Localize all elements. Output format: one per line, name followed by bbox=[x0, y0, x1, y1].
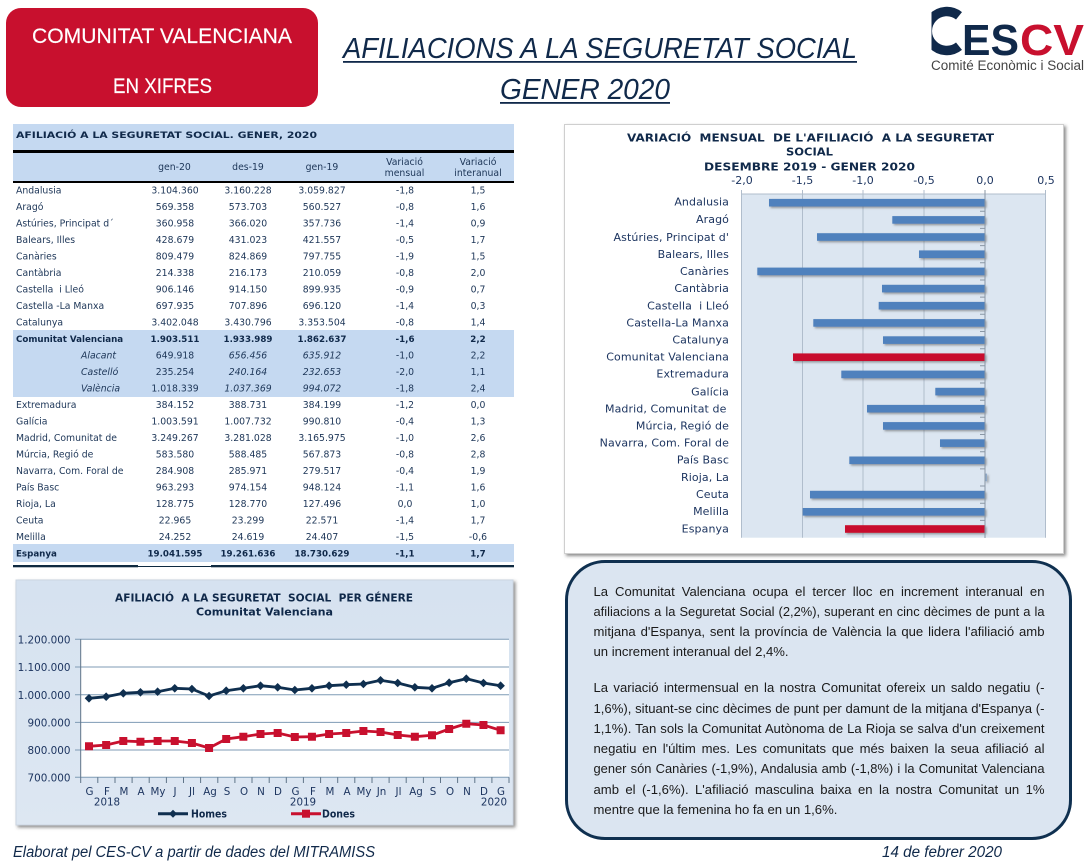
line chart title: Comunitat Valenciana bbox=[196, 606, 333, 618]
x axis labels: Ag bbox=[203, 786, 217, 798]
row: València: 1.037.369 bbox=[224, 384, 272, 394]
y axis labels: 1.000.000 bbox=[18, 690, 70, 702]
row: Catalunya: Catalunya bbox=[16, 318, 63, 328]
category labels: Catalunya bbox=[672, 334, 729, 346]
y axis labels: 900.000 bbox=[28, 718, 70, 730]
badge: Comunitat Valenciana en xifres: EN XIFRES bbox=[113, 75, 212, 98]
row: Aragó: 1,6 bbox=[471, 202, 485, 213]
row: Canàries: Canàries bbox=[16, 252, 57, 262]
row: Astúries: Astúries, Principat d´ bbox=[16, 218, 114, 230]
row: Balears: 421.557 bbox=[303, 235, 341, 246]
row: Melilla: Melilla bbox=[16, 532, 46, 543]
row: Navarra: Navarra, Com. Foral de bbox=[16, 466, 124, 477]
row: País Basc: 1,6 bbox=[471, 482, 485, 494]
row: Madrid: 3.165.975 bbox=[298, 433, 346, 444]
badge: Comunitat Valenciana en xifres bbox=[6, 8, 318, 107]
row: Comunitat Valenciana: 1.862.637 bbox=[298, 335, 346, 345]
row: Aragó: 573.703 bbox=[229, 202, 267, 213]
x axis labels: D bbox=[480, 786, 488, 798]
row: Castella i Lleó: 899.935 bbox=[303, 284, 341, 296]
row: Madrid: 2,6 bbox=[471, 433, 485, 444]
row: Andalusia: -1,8 bbox=[396, 186, 414, 196]
row: Andalusia: 3.160.228 bbox=[224, 186, 272, 196]
row: Castelló: -2,0 bbox=[396, 367, 414, 378]
row: Navarra: 279.517 bbox=[303, 466, 341, 477]
row: Catalunya: 3.430.796 bbox=[224, 318, 272, 328]
row: Rioja: 0,0 bbox=[398, 499, 412, 510]
row: Extremadura: -1,2 bbox=[396, 400, 414, 411]
row: Catalunya bbox=[16, 318, 485, 328]
x axis labels: -2,0 bbox=[731, 174, 753, 187]
category labels: Balears, Illes bbox=[658, 248, 729, 261]
row: Madrid: -1,0 bbox=[396, 433, 414, 444]
row: Galícia: -0,4 bbox=[396, 416, 414, 428]
bar chart title: SOCIAL bbox=[786, 146, 833, 158]
x axis labels: Jn bbox=[376, 786, 386, 798]
row: Melilla: -0,6 bbox=[469, 532, 487, 543]
row: Rioja bbox=[16, 499, 485, 510]
row: Alacant: 2,2 bbox=[471, 350, 485, 362]
row: Astúries: 0,9 bbox=[471, 218, 485, 230]
row: Alacant: Alacant bbox=[80, 350, 116, 362]
legend: Homes bbox=[191, 808, 227, 820]
x axis labels bbox=[731, 174, 1055, 187]
row: Comunitat Valenciana: 1.933.989 bbox=[224, 335, 272, 345]
x axis labels: -1,0 bbox=[852, 174, 874, 187]
x axis labels: D bbox=[274, 786, 282, 798]
row: Aragó bbox=[16, 202, 485, 213]
title: GENER 2020 bbox=[500, 74, 670, 106]
row: Múrcia: -0,8 bbox=[396, 450, 414, 460]
bars bbox=[757, 199, 987, 533]
y axis labels: 1.200.000 bbox=[18, 634, 70, 646]
text block: commentary: mitjana d'Espanya, sent la província de València la que lidera l'afiliació amb bbox=[594, 624, 1044, 639]
title: AFILIACIONS A LA SEGURETAT SOCIAL bbox=[341, 33, 857, 65]
row: Castella i Lleó: 906.146 bbox=[156, 284, 194, 296]
logo: CES-CV bbox=[920, 0, 1085, 73]
row: Ceuta: 1,7 bbox=[471, 516, 485, 526]
row: Catalunya: 1,4 bbox=[471, 318, 485, 328]
row: Castella-La Manxa: 696.120 bbox=[303, 301, 341, 312]
row: Balears: 428.679 bbox=[156, 235, 194, 246]
row: Comunitat Valenciana: -1,6 bbox=[396, 335, 414, 345]
row: Castelló: 232.653 bbox=[303, 367, 341, 378]
row: Castella-La Manxa: 707.896 bbox=[229, 301, 267, 312]
x axis labels: N bbox=[463, 786, 471, 798]
row: Múrcia: Múrcia, Regió de bbox=[16, 450, 94, 460]
row: València: 1.018.339 bbox=[151, 384, 199, 394]
x axis labels: F bbox=[104, 786, 110, 798]
row: Astúries: 360.958 bbox=[156, 218, 194, 230]
row: Extremadura bbox=[16, 400, 485, 411]
text block: commentary: gener són Canàries (-1,9%), Andalusia amb (-1,8%) i la Comunitat Valenciana bbox=[594, 761, 1044, 776]
row: Madrid: 3.249.267 bbox=[151, 433, 199, 444]
text block: commentary: La Comunitat Valenciana ocupa el tercer lloc en increment interanual en bbox=[594, 584, 1044, 599]
x axis labels: G bbox=[497, 786, 505, 798]
row: València bbox=[81, 384, 485, 394]
row: Castella i Lleó: 914.150 bbox=[229, 284, 267, 296]
row: Cantàbria: -0,8 bbox=[396, 268, 414, 279]
x axis labels: Jl bbox=[188, 786, 195, 798]
x axis labels: M bbox=[326, 786, 334, 798]
row: Comunitat Valenciana: Comunitat Valenciana bbox=[16, 335, 123, 345]
row: Melilla: 24.252 bbox=[159, 532, 191, 543]
row: Balears: -0,5 bbox=[396, 235, 414, 246]
row: Cantàbria: Cantàbria bbox=[16, 268, 61, 279]
row: Castella i Lleó: -0,9 bbox=[396, 284, 414, 296]
row: Castella-La Manxa: Castella -La Manxa bbox=[16, 301, 104, 312]
row: Castella-La Manxa: -1,4 bbox=[396, 301, 414, 312]
category labels: Melilla bbox=[693, 505, 729, 518]
row: Galícia: 990.810 bbox=[303, 416, 341, 428]
category labels: Cantàbria bbox=[674, 282, 729, 295]
row: Castella-La Manxa: 0,3 bbox=[471, 301, 485, 312]
x axis labels: O bbox=[446, 786, 454, 798]
y axis labels: 700.000 bbox=[28, 772, 70, 784]
title bbox=[341, 33, 857, 106]
footer: date: 14 de febrer 2020 bbox=[882, 844, 1002, 861]
row: Castelló: 235.254 bbox=[156, 367, 194, 378]
text block: commentary: afiliacions a la Seguretat Social (2,2%), superant en cinc dècimes de punt a la bbox=[594, 604, 1044, 619]
row: Ceuta: Ceuta bbox=[16, 516, 43, 526]
y axis labels bbox=[18, 634, 70, 784]
row: Balears: 1,7 bbox=[471, 235, 485, 246]
row: País Basc: 963.293 bbox=[156, 482, 194, 494]
row: Castelló: Castelló bbox=[81, 367, 119, 378]
row: Múrcia bbox=[16, 450, 485, 460]
text block: commentary: amb el (-1,6%). L'afiliació masculina baixa en la nostra Comunitat un 1% bbox=[594, 782, 1044, 797]
row: Ceuta: 22.571 bbox=[306, 516, 338, 526]
row: Navarra: 285.971 bbox=[229, 466, 267, 477]
bar chart title bbox=[627, 132, 995, 174]
row: València: 2,4 bbox=[471, 384, 485, 394]
table header: gen-19 bbox=[306, 162, 338, 173]
row: Ceuta bbox=[16, 516, 485, 526]
panel: line chart afiliació per gènere bbox=[16, 580, 513, 825]
row: Espanya: -1,1 bbox=[396, 550, 414, 560]
text block: commentary: 1,1%). Tan sols la Comunitat Autònoma de La Rioja se salva d'un creixement bbox=[594, 721, 1044, 736]
series: Dones bbox=[85, 720, 505, 752]
row: País Basc bbox=[16, 482, 485, 494]
category labels: Canàries bbox=[680, 265, 729, 278]
row: Comunitat Valenciana: 1.903.511 bbox=[151, 335, 199, 345]
row: Rioja: 128.775 bbox=[156, 499, 194, 510]
row: Alacant: -1,0 bbox=[396, 350, 414, 362]
row: Catalunya: -0,8 bbox=[396, 318, 414, 328]
row: Andalusia: 3.104.360 bbox=[151, 186, 199, 196]
row: Aragó: 560.527 bbox=[303, 202, 341, 213]
row: Cantàbria: 2,0 bbox=[471, 268, 485, 279]
row: Navarra: 284.908 bbox=[156, 466, 194, 477]
x axis labels: 2020 bbox=[481, 796, 507, 808]
row: Alacant bbox=[80, 350, 485, 362]
x axis labels: G bbox=[86, 786, 94, 798]
x axis labels: 2019 bbox=[290, 796, 316, 808]
legend: Dones bbox=[322, 808, 355, 820]
table header: mensual bbox=[385, 168, 424, 179]
table header: Variació bbox=[386, 157, 423, 168]
row: País Basc: 974.154 bbox=[229, 482, 267, 494]
row: València: València bbox=[81, 384, 120, 394]
row: Espanya: 1,7 bbox=[470, 550, 486, 560]
row: País Basc: 948.124 bbox=[303, 482, 341, 494]
row: Galícia: Galícia bbox=[16, 416, 47, 428]
row: País Basc: -1,1 bbox=[396, 482, 414, 494]
category labels: Madrid, Comunitat de bbox=[605, 402, 727, 416]
category labels bbox=[600, 196, 729, 536]
row: Galícia: 1,3 bbox=[471, 416, 485, 428]
row: Espanya: 18.730.629 bbox=[295, 550, 349, 560]
row: Espanya bbox=[16, 550, 486, 560]
row: Balears: 431.023 bbox=[229, 235, 267, 246]
table header bbox=[158, 157, 502, 179]
text block: commentary: 1,6%), situant-se cinc dècimes de punt per damunt de la mitjana d'Espanya (- bbox=[594, 701, 1044, 716]
text block: commentary: mentre que la femenina ho fa en un 1,6%. bbox=[594, 802, 837, 817]
logo: CES-CV: Comité Econòmic i Social bbox=[931, 58, 1084, 73]
row: Cantàbria: 216.173 bbox=[229, 268, 267, 279]
logo: CES-CV: ES bbox=[962, 16, 1019, 65]
row: Castella i Lleó: 0,7 bbox=[471, 284, 485, 296]
table header: des-19 bbox=[232, 162, 264, 173]
row: Aragó: Aragó bbox=[16, 202, 44, 213]
category labels: Andalusia bbox=[674, 196, 729, 208]
row: Melilla: 24.619 bbox=[232, 532, 264, 543]
row: Astúries: 357.736 bbox=[303, 218, 341, 230]
row: Extremadura: 0,0 bbox=[471, 400, 485, 411]
row: Espanya: 19.261.636 bbox=[221, 550, 275, 560]
category labels: Múrcia, Regió de bbox=[636, 420, 729, 432]
category labels: Castella-La Manxa bbox=[626, 316, 729, 330]
row: Melilla bbox=[16, 532, 487, 543]
row: Castella i Lleó bbox=[16, 284, 485, 296]
row: Canàries bbox=[16, 252, 485, 262]
x axis labels: 0,5 bbox=[1037, 174, 1055, 187]
row: Espanya: 19.041.595 bbox=[148, 550, 202, 560]
x axis labels: A bbox=[137, 786, 145, 798]
row: Aragó: 569.358 bbox=[156, 202, 194, 213]
x axis labels: 0,0 bbox=[976, 174, 994, 187]
row: Cantàbria: 210.059 bbox=[303, 268, 341, 279]
x axis labels: A bbox=[343, 786, 351, 798]
category labels: Comunitat Valenciana bbox=[606, 350, 729, 364]
x axis labels: F bbox=[310, 786, 316, 798]
category labels: Galícia bbox=[691, 386, 729, 398]
row: Rioja: 127.496 bbox=[303, 499, 341, 510]
category labels: Astúries, Principat d' bbox=[614, 231, 729, 244]
row: Alacant: 649.918 bbox=[156, 350, 194, 362]
row: Canàries: 809.479 bbox=[156, 252, 194, 262]
x axis labels: My bbox=[151, 786, 165, 798]
row: Canàries: 1,5 bbox=[471, 252, 485, 262]
x axis labels: Jl bbox=[395, 786, 401, 798]
row: Espanya: Espanya bbox=[16, 550, 57, 560]
row: Extremadura: 384.199 bbox=[303, 400, 341, 411]
row: Madrid bbox=[16, 433, 485, 444]
x axis labels: J bbox=[172, 786, 177, 798]
footer: source: Elaborat pel CES-CV a partir de dades del MITRAMISS bbox=[13, 844, 376, 861]
row: Comunitat Valenciana bbox=[16, 335, 486, 345]
category labels: Aragó bbox=[696, 213, 729, 226]
legend bbox=[158, 808, 355, 820]
row: Balears bbox=[16, 235, 485, 246]
row: Alacant: 635.912 bbox=[303, 350, 341, 362]
y axis labels: 800.000 bbox=[28, 745, 70, 757]
row: Cantàbria: 214.338 bbox=[156, 268, 194, 279]
row: Astúries bbox=[16, 218, 485, 230]
row: Cantàbria bbox=[16, 268, 485, 279]
category labels: Extremadura bbox=[656, 368, 729, 380]
row: Astúries: -1,4 bbox=[396, 218, 414, 230]
x axis labels: S bbox=[430, 786, 436, 798]
row: Canàries: 824.869 bbox=[229, 252, 267, 262]
x axis labels: O bbox=[240, 786, 248, 798]
category labels: Rioja, La bbox=[681, 471, 729, 484]
row: Ceuta: 22.965 bbox=[159, 516, 191, 526]
row: Rioja: 128.770 bbox=[229, 499, 267, 510]
row: Navarra bbox=[16, 466, 485, 477]
line chart title bbox=[115, 592, 413, 618]
bar chart title: VARIACIÓ MENSUAL DE L'AFILIACIÓ A LA SEGURETAT bbox=[627, 132, 995, 144]
row: Múrcia: 567.873 bbox=[303, 450, 341, 460]
row: Castella i Lleó: Castella i Lleó bbox=[16, 284, 84, 296]
row: Rioja: 1,0 bbox=[471, 499, 485, 510]
row: Galícia: 1.003.591 bbox=[151, 416, 199, 428]
x axis labels: -0,5 bbox=[913, 174, 935, 187]
row: Múrcia: 588.485 bbox=[229, 450, 267, 460]
row: Castella-La Manxa: 697.935 bbox=[156, 301, 194, 312]
category labels: Espanya bbox=[682, 522, 729, 536]
x axis labels: G bbox=[292, 786, 300, 798]
row: Balears: Balears, Illes bbox=[16, 235, 75, 246]
x axis labels: S bbox=[224, 786, 230, 798]
row: Catalunya: 3.402.048 bbox=[151, 318, 199, 328]
category labels: Navarra, Com. Foral de bbox=[600, 436, 729, 450]
row: Andalusia: 3.059.827 bbox=[298, 186, 346, 196]
row: Melilla: -1,5 bbox=[396, 532, 414, 543]
table header: gen-20 bbox=[158, 162, 191, 173]
line chart title: AFILIACIÓ A LA SEGURETAT SOCIAL PER GÉNERE bbox=[115, 592, 413, 604]
badge: Comunitat Valenciana en xifres: COMUNITAT VALENCIANA bbox=[32, 25, 292, 48]
row: Madrid: Madrid, Comunitat de bbox=[16, 433, 117, 444]
table title: AFILIACIÓ A LA SEGURETAT SOCIAL. GENER, 2020 bbox=[16, 129, 317, 141]
category labels: Ceuta bbox=[696, 488, 729, 501]
series: Homes bbox=[85, 674, 505, 703]
text block: commentary: La variació intermensual en la nostra Comunitat ofereix un saldo negatiu (- bbox=[594, 680, 1044, 695]
row: Aragó: -0,8 bbox=[396, 202, 414, 213]
row: Andalusia bbox=[16, 186, 485, 196]
row: Extremadura: 388.731 bbox=[229, 400, 267, 411]
category labels: Castella i Lleó bbox=[647, 300, 729, 312]
row: Ceuta: -1,4 bbox=[396, 516, 414, 526]
row: València: -1,8 bbox=[396, 384, 414, 394]
row: Galícia bbox=[16, 416, 485, 428]
row: Múrcia: 2,8 bbox=[471, 450, 485, 460]
x axis labels: My bbox=[357, 786, 371, 798]
row: Galícia: 1.007.732 bbox=[224, 416, 272, 428]
text block: commentary bbox=[565, 560, 1072, 840]
row: Navarra: 1,9 bbox=[471, 466, 485, 477]
logo: CES-CV: CV bbox=[1020, 16, 1085, 65]
x axis labels: N bbox=[257, 786, 265, 798]
row: Melilla: 24.407 bbox=[306, 532, 338, 543]
row: Madrid: 3.281.028 bbox=[224, 433, 272, 444]
row: Alacant: 656.456 bbox=[229, 350, 267, 362]
bar chart title: DESEMBRE 2019 - GENER 2020 bbox=[704, 162, 915, 174]
row: Comunitat Valenciana: 2,2 bbox=[470, 335, 486, 345]
row: Múrcia: 583.580 bbox=[156, 450, 194, 460]
row: Castelló bbox=[81, 367, 485, 378]
row: Andalusia: 1,5 bbox=[471, 186, 485, 196]
row: Castella-La Manxa bbox=[16, 301, 485, 312]
row: País Basc: País Basc bbox=[16, 482, 59, 494]
x axis labels: M bbox=[120, 786, 128, 798]
x axis labels: -1,5 bbox=[792, 174, 813, 187]
table header: Variació bbox=[460, 157, 497, 168]
category labels: País Basc bbox=[677, 454, 729, 466]
text block: commentary: un increment interanual del 2,4%. bbox=[594, 644, 789, 659]
row: Andalusia: Andalusia bbox=[16, 186, 61, 196]
x axis labels: Ag bbox=[409, 786, 423, 798]
row: Castelló: 1,1 bbox=[471, 367, 485, 378]
row: Astúries: 366.020 bbox=[229, 218, 267, 230]
row: Canàries: 797.755 bbox=[303, 252, 341, 262]
panel: bar chart variació mensual bbox=[564, 124, 1064, 554]
y axis labels: 1.100.000 bbox=[18, 662, 70, 674]
row: Ceuta: 23.299 bbox=[232, 516, 264, 526]
row: Extremadura: 384.152 bbox=[156, 400, 194, 411]
row: Rioja: Rioja, La bbox=[16, 499, 56, 510]
table header: interanual bbox=[454, 168, 502, 179]
row: Canàries: -1,9 bbox=[396, 252, 414, 262]
x axis labels bbox=[86, 786, 507, 808]
row: Castelló: 240.164 bbox=[229, 367, 267, 378]
x axis labels: 2018 bbox=[94, 796, 120, 808]
row: Navarra: -0,4 bbox=[396, 466, 414, 477]
row: Catalunya: 3.353.504 bbox=[298, 318, 346, 328]
row: València: 994.072 bbox=[303, 384, 341, 394]
row: Extremadura: Extremadura bbox=[16, 400, 76, 411]
table: afiliació per comunitats bbox=[13, 124, 514, 567]
text block: commentary: negatiu en l'últim mes. Les comunitats que més baixen la seua afiliació al bbox=[594, 741, 1044, 756]
